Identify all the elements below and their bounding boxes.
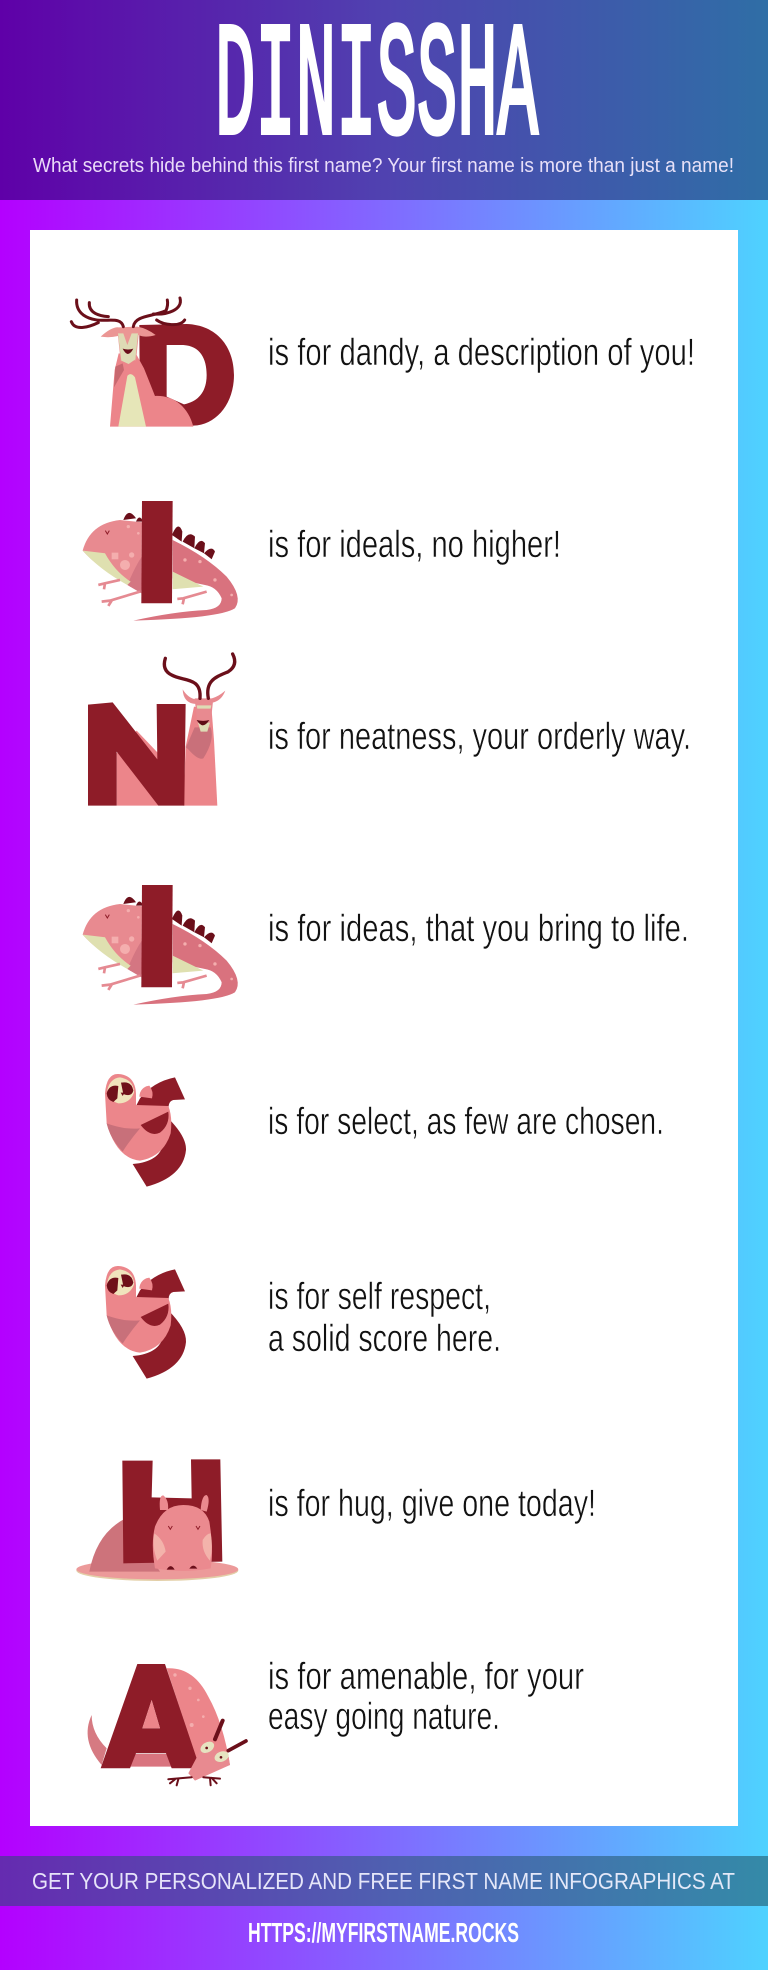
text: second S lines: is for self respect, — [268, 1276, 491, 1318]
icon: letter I lizard — [83, 501, 238, 621]
text: second S lines — [268, 1276, 501, 1360]
header band — [0, 0, 768, 200]
text: A lines — [268, 1656, 584, 1738]
subtitle: What secrets hide behind this first name? Your first name is more than just a name! — [33, 155, 734, 177]
text: A lines: is for amenable, for your — [268, 1656, 584, 1698]
icon: letter S sloth repeat — [105, 1266, 186, 1379]
icon: letter D deer — [71, 298, 234, 427]
text: second S lines: a solid score here. — [268, 1318, 501, 1360]
text: H line: is for hug, give one today! — [268, 1483, 596, 1525]
panel: white letter list — [30, 230, 738, 1826]
icon: letter H hippo — [76, 1459, 238, 1581]
icon: letter N gazelle — [88, 654, 235, 806]
icon: letter A armadillo — [88, 1664, 246, 1785]
footer band — [0, 1856, 768, 1906]
text: A lines: easy going nature. — [268, 1696, 500, 1738]
icon: letter S sloth — [105, 1074, 186, 1187]
icon: letter I lizard repeat — [83, 885, 238, 1005]
footer url: HTTPS://MYFIRSTNAME.ROCKS — [248, 1917, 519, 1948]
text: I line: is for ideals, no higher! — [268, 524, 561, 566]
